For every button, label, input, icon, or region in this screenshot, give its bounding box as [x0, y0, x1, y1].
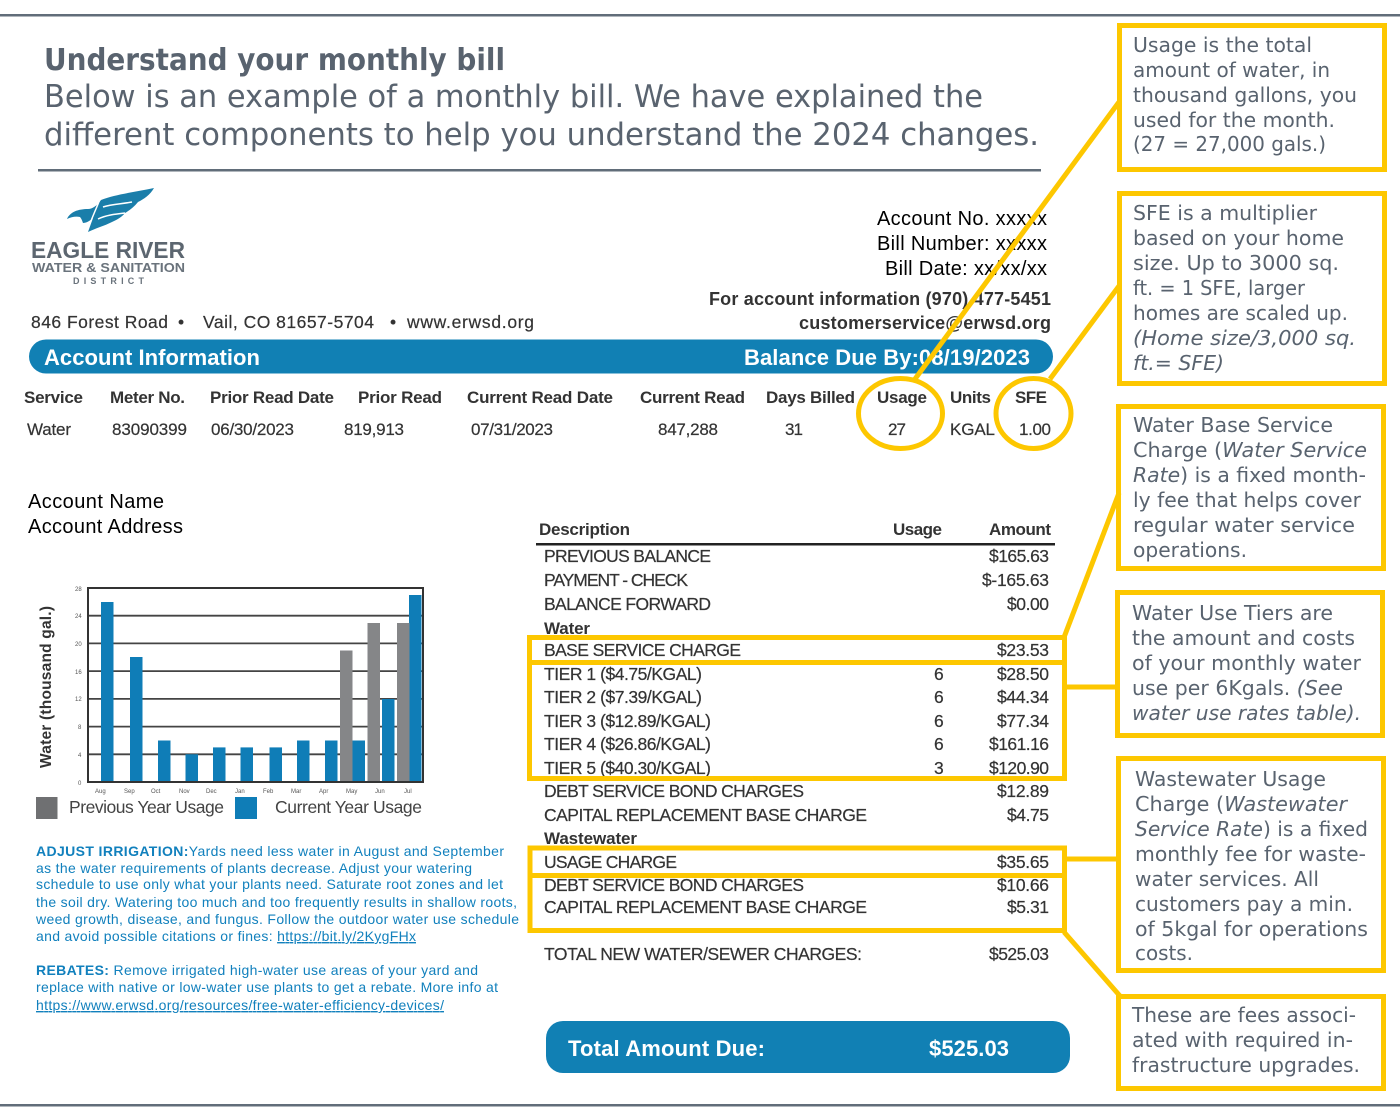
- highlight: usage and SFE circles: [858, 378, 1071, 448]
- charges table: USAGE CHARGE: [544, 852, 677, 872]
- account numbers: Bill Date: xx/xx/xx: [885, 258, 1047, 280]
- account table: 83090399: [112, 420, 187, 439]
- account table: 847,288: [658, 420, 718, 439]
- charges table: [536, 520, 1055, 964]
- callout: wastewater usage charge: customers pay a min.: [1135, 892, 1353, 916]
- bar chart: water usage: 24: [75, 614, 82, 620]
- title: Below is an example of a monthly bill. We have explained the: [44, 79, 983, 115]
- bar chart: water usage: 12: [75, 697, 82, 703]
- account numbers: [877, 208, 1047, 280]
- charges table: $44.34: [997, 687, 1049, 707]
- callout: usage: [1120, 26, 1384, 170]
- bar chart: water usage: Dec: [206, 789, 217, 795]
- bar chart: water usage: Oct: [151, 789, 161, 795]
- contact information: [709, 289, 1051, 333]
- title: Understand your monthly bill: [44, 43, 505, 78]
- bar chart: water usage: Jul: [404, 789, 412, 795]
- account table: Prior Read Date: [210, 388, 334, 407]
- irrigation text block: schedule to use only what your plants need. Saturate root zones and let: [36, 876, 503, 892]
- charges table: PAYMENT - CHECK: [544, 570, 688, 590]
- irrigation text block: [35, 843, 519, 944]
- charges table: 6: [934, 711, 944, 731]
- charges table: 3: [934, 758, 944, 778]
- irrigation text block: and avoid possible citations or fines: https://bit.ly/2KygFHx: [36, 928, 416, 944]
- charges table: Wastewater: [544, 829, 637, 848]
- callout: water base service charge: Water Base Service: [1133, 413, 1333, 437]
- rebates text block: REBATES: Remove irrigated high-water use areas of your yard and: [36, 962, 478, 978]
- charges table: 6: [934, 687, 944, 707]
- callout: SFE: [1120, 194, 1384, 384]
- icon: eagle river logo: DISTRICT: [73, 276, 144, 286]
- callout: water use tiers: the amount and costs: [1132, 626, 1355, 650]
- icon: eagle river logo: WATER & SANITATION: [32, 261, 185, 275]
- account table: Current Read Date: [467, 388, 613, 407]
- total amount due banner: [546, 1021, 1070, 1073]
- charges table: $165.63: [989, 546, 1049, 566]
- bar chart: water usage: Feb: [263, 789, 274, 795]
- icon: eagle river logo: [31, 188, 185, 286]
- address line: Vail, CO 81657-5704: [203, 312, 374, 332]
- chart legend: Current Year Usage: [275, 797, 422, 817]
- callout: usage: used for the month.: [1133, 108, 1335, 132]
- charges table: $28.50: [997, 664, 1049, 684]
- account table: Units: [950, 388, 991, 407]
- highlight: bill line boxes: [530, 638, 1064, 930]
- account name: Account Name: [28, 491, 164, 513]
- account information banner: Account Information: [44, 345, 260, 370]
- account name: Account Address: [28, 516, 183, 538]
- account numbers: Account No. xxxxx: [877, 208, 1047, 230]
- chart legend: [36, 797, 422, 819]
- bar chart: water usage: 16: [75, 670, 82, 676]
- irrigation text block: weed growth, disease, and fungus. Follow the outdoor water use schedule: [35, 911, 519, 927]
- title: [44, 43, 1039, 153]
- connector lines: [915, 102, 1120, 996]
- callout: usage: amount of water, in: [1133, 58, 1330, 82]
- bar chart: water usage: Aug: [95, 789, 106, 795]
- charges table: TIER 2 ($7.39/KGAL): [544, 687, 702, 707]
- bar chart: water usage: 28: [75, 587, 82, 593]
- charges table: CAPITAL REPLACEMENT BASE CHARGE: [544, 805, 867, 825]
- callout: wastewater usage charge: [1118, 758, 1384, 970]
- chart legend: Previous Year Usage: [69, 797, 224, 817]
- account name: [28, 491, 183, 538]
- callout: water base service charge: [1118, 406, 1384, 568]
- bar chart: water usage: 20: [75, 642, 82, 648]
- callout: infrastructure fees: frastructure upgrades.: [1132, 1053, 1360, 1077]
- callout: wastewater usage charge: monthly fee for waste-: [1135, 842, 1366, 866]
- callout: usage: Usage is the total: [1133, 33, 1312, 57]
- account table: Service: [24, 388, 83, 407]
- address line: www.erwsd.org: [406, 312, 534, 332]
- account information banner: Balance Due By:08/19/2023: [744, 345, 1030, 370]
- callout: water base service charge: operations.: [1133, 538, 1247, 562]
- callout: wastewater usage charge: Wastewater Usage: [1135, 767, 1326, 791]
- charges table: DEBT SERVICE BOND CHARGES: [544, 875, 804, 895]
- bar chart: water usage: Nov: [179, 789, 190, 795]
- rebates text block: replace with native or low-water use plants to get a rebate. More info at: [36, 979, 498, 995]
- bar chart: water usage: Jan: [235, 789, 245, 795]
- charges table: BALANCE FORWARD: [544, 594, 711, 614]
- bar chart: water usage: Mar: [291, 789, 301, 795]
- callout: SFE: based on your home: [1133, 226, 1344, 250]
- bar chart: water usage: May: [346, 789, 357, 795]
- charges table: TIER 3 ($12.89/KGAL): [544, 711, 711, 731]
- callout: usage: (27 = 27,000 gals.): [1133, 132, 1326, 156]
- bar chart: water usage: 0: [78, 781, 82, 787]
- callout: water base service charge: Charge (Water Service: [1133, 438, 1367, 462]
- callout: water use tiers: use per 6Kgals. (See: [1132, 676, 1343, 700]
- charges table: $35.65: [997, 852, 1049, 872]
- account table: 06/30/2023: [211, 420, 294, 439]
- callout: SFE: homes are scaled up.: [1133, 301, 1348, 325]
- charges table: $120.90: [989, 758, 1049, 778]
- charges table: Amount: [989, 520, 1051, 539]
- charges table: $5.31: [1007, 897, 1049, 917]
- callout: water use tiers: Water Use Tiers are: [1132, 601, 1333, 625]
- account table: Usage: [877, 388, 927, 407]
- total amount due banner: Total Amount Due:: [568, 1036, 765, 1061]
- bar chart: water usage: Water (thousand gal.): [38, 606, 55, 768]
- charges table: BASE SERVICE CHARGE: [544, 640, 741, 660]
- account table: SFE: [1015, 388, 1047, 407]
- account numbers: Bill Number: xxxxx: [877, 233, 1047, 255]
- contact information: For account information (970) 477-5451: [709, 289, 1051, 309]
- address line: •: [390, 312, 396, 332]
- callout: wastewater usage charge: Charge (Wastewater: [1135, 792, 1349, 816]
- rebates text block: [36, 962, 498, 1013]
- account table: Days Billed: [766, 388, 855, 407]
- charges table: $-165.63: [982, 570, 1049, 590]
- charges table: 6: [934, 734, 944, 754]
- charges table: $4.75: [1007, 805, 1049, 825]
- callout: water use tiers: [1118, 592, 1382, 736]
- charges table: TIER 4 ($26.86/KGAL): [544, 734, 711, 754]
- irrigation text block: as the water requirements of plants decrease. Adjust your watering: [36, 860, 472, 876]
- charges table: $10.66: [997, 875, 1049, 895]
- callout: SFE: SFE is a multiplier: [1133, 201, 1318, 225]
- account table: 31: [785, 420, 803, 439]
- total amount due banner: $525.03: [929, 1036, 1009, 1061]
- charges table: DEBT SERVICE BOND CHARGES: [544, 781, 804, 801]
- account information banner: [29, 340, 1053, 374]
- bar chart: water usage: [38, 587, 423, 795]
- callout: water use tiers: water use rates table).: [1132, 701, 1361, 725]
- callout: water use tiers: of your monthly water: [1132, 651, 1362, 675]
- bar chart: water usage: 8: [78, 725, 82, 731]
- charges table: PREVIOUS BALANCE: [544, 546, 711, 566]
- charges table: Water: [544, 619, 590, 638]
- account table: Meter No.: [110, 388, 185, 407]
- account table: 27: [888, 420, 906, 439]
- charges table: TOTAL NEW WATER/SEWER CHARGES:: [544, 944, 862, 964]
- callout: wastewater usage charge: water services. All: [1135, 867, 1319, 891]
- charges table: $12.89: [997, 781, 1049, 801]
- callout: wastewater usage charge: of 5kgal for operations: [1135, 917, 1368, 941]
- callout: SFE: ft. = 1 SFE, larger: [1133, 276, 1306, 300]
- charges table: $77.34: [997, 711, 1049, 731]
- callout: infrastructure fees: These are fees associ-: [1131, 1003, 1356, 1027]
- charges table: Usage: [893, 520, 942, 539]
- account table: Current Read: [640, 388, 745, 407]
- callout: SFE: size. Up to 3000 sq.: [1133, 251, 1339, 275]
- callout: water base service charge: Rate) is a fixed month-: [1133, 463, 1366, 487]
- charges table: Description: [539, 520, 630, 539]
- callout: SFE: ft.= SFE): [1133, 351, 1224, 375]
- callout: wastewater usage charge: costs.: [1135, 941, 1193, 965]
- account table: KGAL: [950, 420, 995, 439]
- account table: 819,913: [344, 420, 404, 439]
- bar chart: water usage: Apr: [319, 789, 328, 795]
- callout: usage: thousand gallons, you: [1133, 83, 1357, 107]
- charges table: 6: [934, 664, 944, 684]
- callout: water base service charge: regular water service: [1133, 513, 1355, 537]
- irrigation text block: ADJUST IRRIGATION:Yards need less water in August and September: [36, 843, 504, 859]
- irrigation text block: the soil dry. Watering too much and too frequently results in shallow roots,: [36, 894, 517, 910]
- bar chart: water usage: 4: [78, 753, 82, 759]
- account table: 07/31/2023: [471, 420, 553, 439]
- callout: SFE: (Home size/3,000 sq.: [1133, 326, 1356, 350]
- address line: •: [178, 312, 184, 332]
- charges table: $161.16: [989, 734, 1049, 754]
- account table: Water: [27, 420, 71, 439]
- title: different components to help you understand the 2024 changes.: [44, 117, 1039, 153]
- bar chart: water usage: Sep: [124, 789, 135, 795]
- charges table: $0.00: [1007, 594, 1049, 614]
- contact information: customerservice@erwsd.org: [799, 313, 1051, 333]
- rebates text block: https://www.erwsd.org/resources/free-water-efficiency-devices/: [36, 997, 444, 1013]
- charges table: $23.53: [997, 640, 1049, 660]
- callout: wastewater usage charge: Service Rate) is a fixed: [1135, 817, 1368, 841]
- callout: water base service charge: ly fee that helps cover: [1133, 488, 1362, 512]
- address line: [31, 312, 534, 332]
- icon: eagle river logo: EAGLE RIVER: [31, 237, 185, 263]
- account table: 1.00: [1019, 420, 1051, 439]
- account table: Prior Read: [358, 388, 442, 407]
- callout: infrastructure fees: [1118, 996, 1384, 1088]
- charges table: TIER 1 ($4.75/KGAL): [544, 664, 702, 684]
- account table: [24, 388, 1051, 439]
- charges table: CAPITAL REPLACEMENT BASE CHARGE: [544, 897, 867, 917]
- bar chart: water usage: Jun: [375, 789, 385, 795]
- callout: infrastructure fees: ated with required in-: [1132, 1028, 1353, 1052]
- charges table: $525.03: [989, 944, 1049, 964]
- address line: 846 Forest Road: [31, 312, 168, 332]
- charges table: TIER 5 ($40.30/KGAL): [544, 758, 711, 778]
